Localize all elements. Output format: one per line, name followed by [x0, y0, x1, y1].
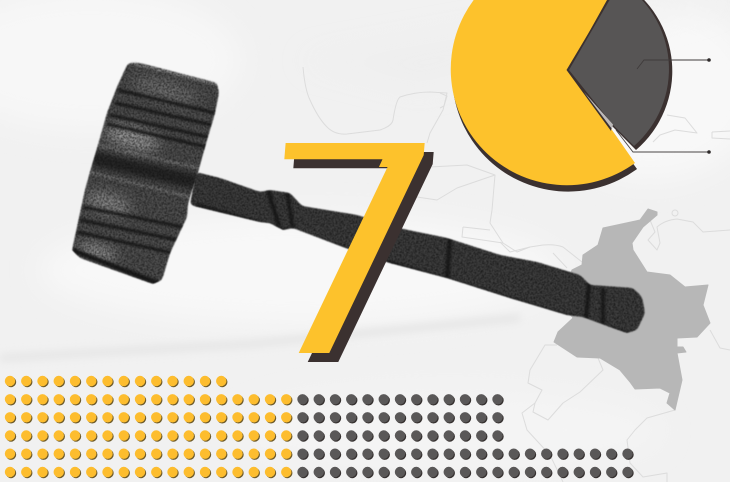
map: highlighted country [554, 209, 710, 410]
pie chart [451, 0, 711, 192]
seven: face: 7 [239, 86, 455, 422]
gavel [72, 63, 645, 335]
leader line: grey slice [637, 58, 711, 69]
grey dots: shadows [304, 400, 629, 473]
pie: small grey slice [566, 0, 672, 150]
yellow dots [10, 381, 286, 472]
grey dots [302, 399, 628, 472]
leader line: sliver slice [616, 130, 711, 154]
pie: large yellow slice [451, 0, 637, 192]
gavel handle [190, 172, 645, 335]
seven: shadow: 7 [248, 95, 464, 431]
yellow dots: shadows [11, 382, 287, 473]
large number seven [284, 143, 434, 362]
gavel head [72, 63, 219, 284]
dot matrix [10, 381, 629, 473]
pie: thin sliver slice [584, 92, 613, 129]
map: country outlines [303, 67, 730, 482]
